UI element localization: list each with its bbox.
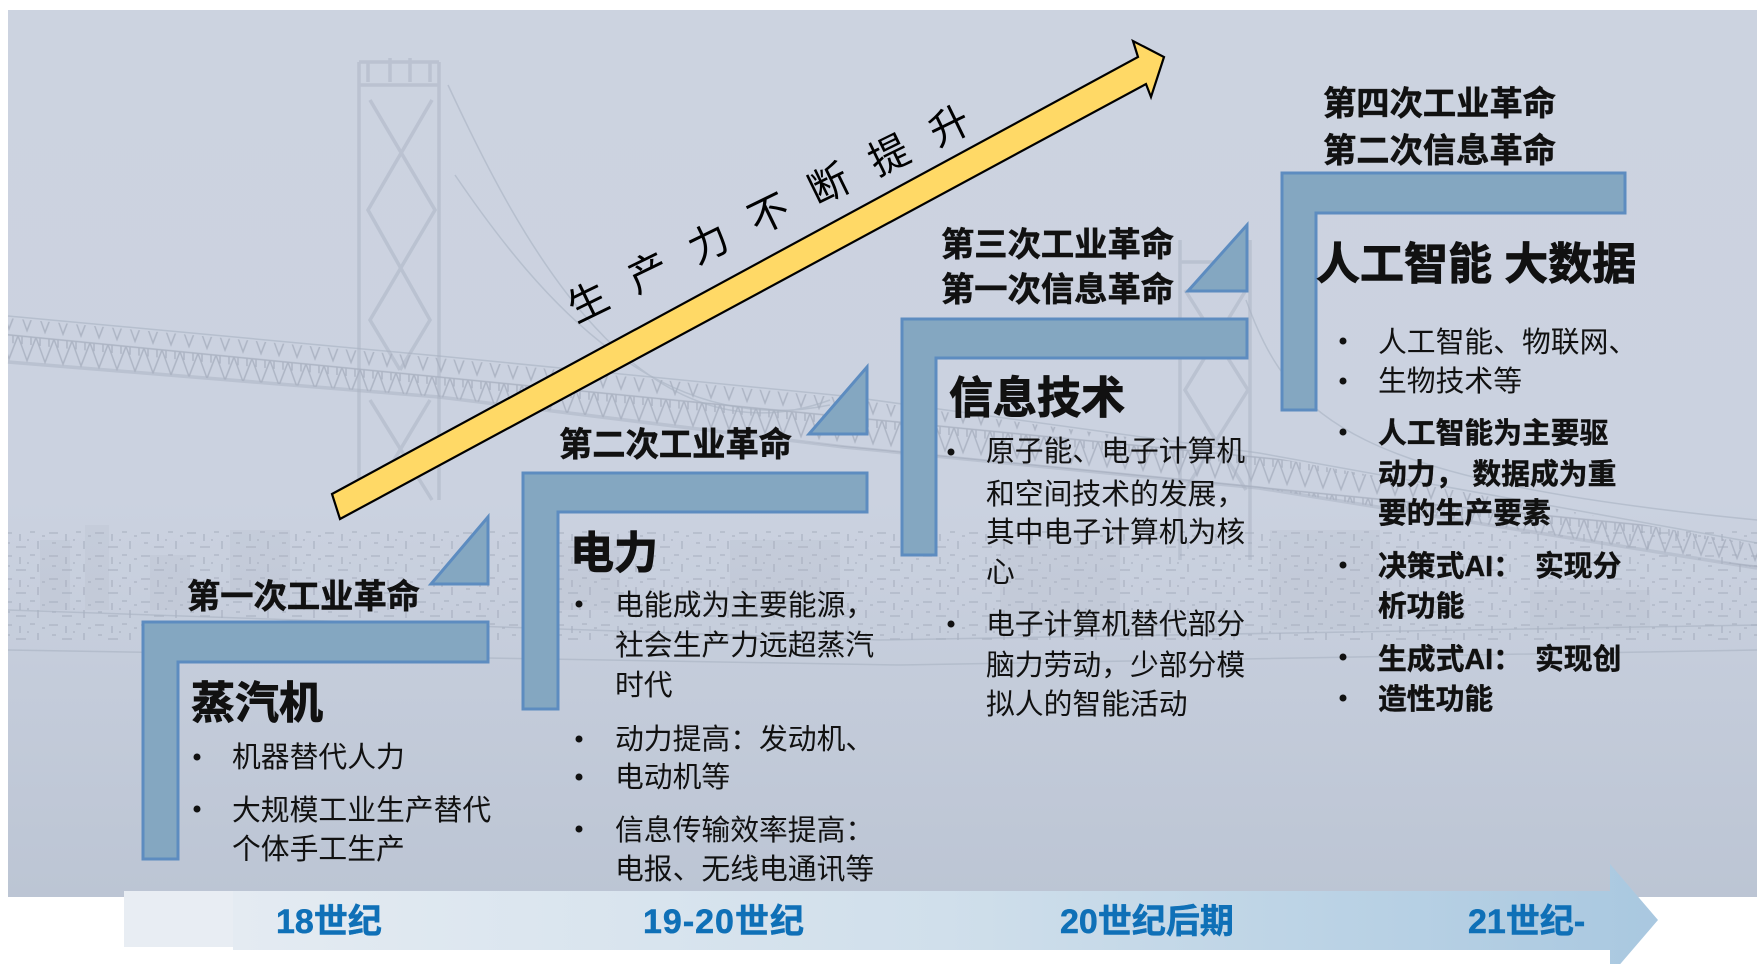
heading: information technology: 信息技术 xyxy=(949,374,1125,423)
bullets: electricity: 电动机等 xyxy=(615,762,730,794)
bullets: AI and big data: 人工智能、物联网、 xyxy=(1378,327,1637,359)
step shape 3 xyxy=(902,319,1247,555)
bullets: information technology: 其中电子计算机为核 xyxy=(986,517,1245,549)
panel: first industrial revolution xyxy=(143,517,491,866)
heading: third industrial / first information revolution: 第三次工业革命 xyxy=(941,226,1174,264)
bullets: information technology: 拟人的智能活动 xyxy=(986,689,1188,721)
bullets: AI and big data: 造性功能 xyxy=(1378,684,1493,716)
heading: steam engine: 蒸汽机 xyxy=(191,679,323,728)
heading: fourth industrial / second information revolution: 第四次工业革命 xyxy=(1323,85,1556,123)
bullets: electricity: 动力提高：发动机、 xyxy=(615,724,874,756)
arrow: productivity rising xyxy=(332,41,1164,519)
bullets: AI and big data: 析功能 xyxy=(1378,591,1465,623)
bullets: steam engine: 个体手工生产 xyxy=(232,834,405,866)
panel: second industrial revolution xyxy=(523,367,874,886)
label: 21st century onward: 21世纪- xyxy=(1468,903,1585,941)
label: 19-20th century: 19-20世纪 xyxy=(643,903,805,941)
bullets: information technology: 脑力劳动，少部分模 xyxy=(986,650,1245,682)
step shape 1 xyxy=(143,622,488,859)
bullets: electricity: 电报、无线电通讯等 xyxy=(615,854,874,886)
bullets: AI and big data: 要的生产要素 xyxy=(1378,498,1551,530)
bullets: electricity xyxy=(576,590,874,886)
step shape 2 xyxy=(523,473,867,709)
bullets: AI and big data: 动力， 数据成为重 xyxy=(1378,459,1616,491)
bullets: information technology: 和空间技术的发展， xyxy=(986,479,1245,511)
heading: electricity: 电力 xyxy=(570,529,658,578)
bullets: AI and big data: 生成式AI： 实现创 xyxy=(1378,644,1621,676)
panel: fourth industrial revolution xyxy=(1282,85,1637,716)
triangle 1 xyxy=(431,517,488,584)
step shape 4 xyxy=(1282,173,1625,410)
bullets: AI and big data xyxy=(1340,327,1637,716)
bullets: information technology: 电子计算机替代部分 xyxy=(986,609,1245,641)
bullets: electricity: 信息传输效率提高： xyxy=(615,815,874,847)
bullets: steam engine xyxy=(194,742,491,866)
heading: second industrial revolution: 第二次工业革命 xyxy=(559,426,792,464)
bullets: information technology: 心 xyxy=(986,557,1015,589)
label: 18th century: 18世纪 xyxy=(276,903,382,941)
bullets: steam engine: 机器替代人力 xyxy=(232,742,405,774)
triangle 2 xyxy=(809,367,867,434)
bullets: AI and big data: 生物技术等 xyxy=(1378,366,1522,398)
label: productivity keeps rising: 生产力不断提升 xyxy=(556,76,1003,334)
label: late 20th century: 20世纪后期 xyxy=(1060,903,1234,941)
bullets: information technology xyxy=(948,436,1245,721)
bullets: AI and big data: 人工智能为主要驱 xyxy=(1378,418,1608,450)
triangle 3 xyxy=(1188,225,1247,291)
bullets: electricity: 电能成为主要能源， xyxy=(615,590,874,622)
bullets: information technology: 原子能、电子计算机 xyxy=(986,436,1245,468)
bullets: AI and big data: 决策式AI： 实现分 xyxy=(1378,551,1622,583)
bullets: electricity: 社会生产力远超蒸汽 xyxy=(615,630,874,662)
bullets: steam engine: 大规模工业生产替代 xyxy=(232,795,491,827)
timeline arrow xyxy=(124,864,1658,964)
panel: fourth industrial revolution: 第二次信息革命 xyxy=(1323,132,1556,170)
bullets: electricity: 时代 xyxy=(615,670,673,702)
panel: third industrial revolution xyxy=(902,225,1247,721)
panel: third industrial revolution: 第一次信息革命 xyxy=(941,271,1174,309)
heading: first industrial revolution: 第一次工业革命 xyxy=(187,578,420,616)
heading: AI and big data: 人工智能 大数据 xyxy=(1316,240,1636,289)
